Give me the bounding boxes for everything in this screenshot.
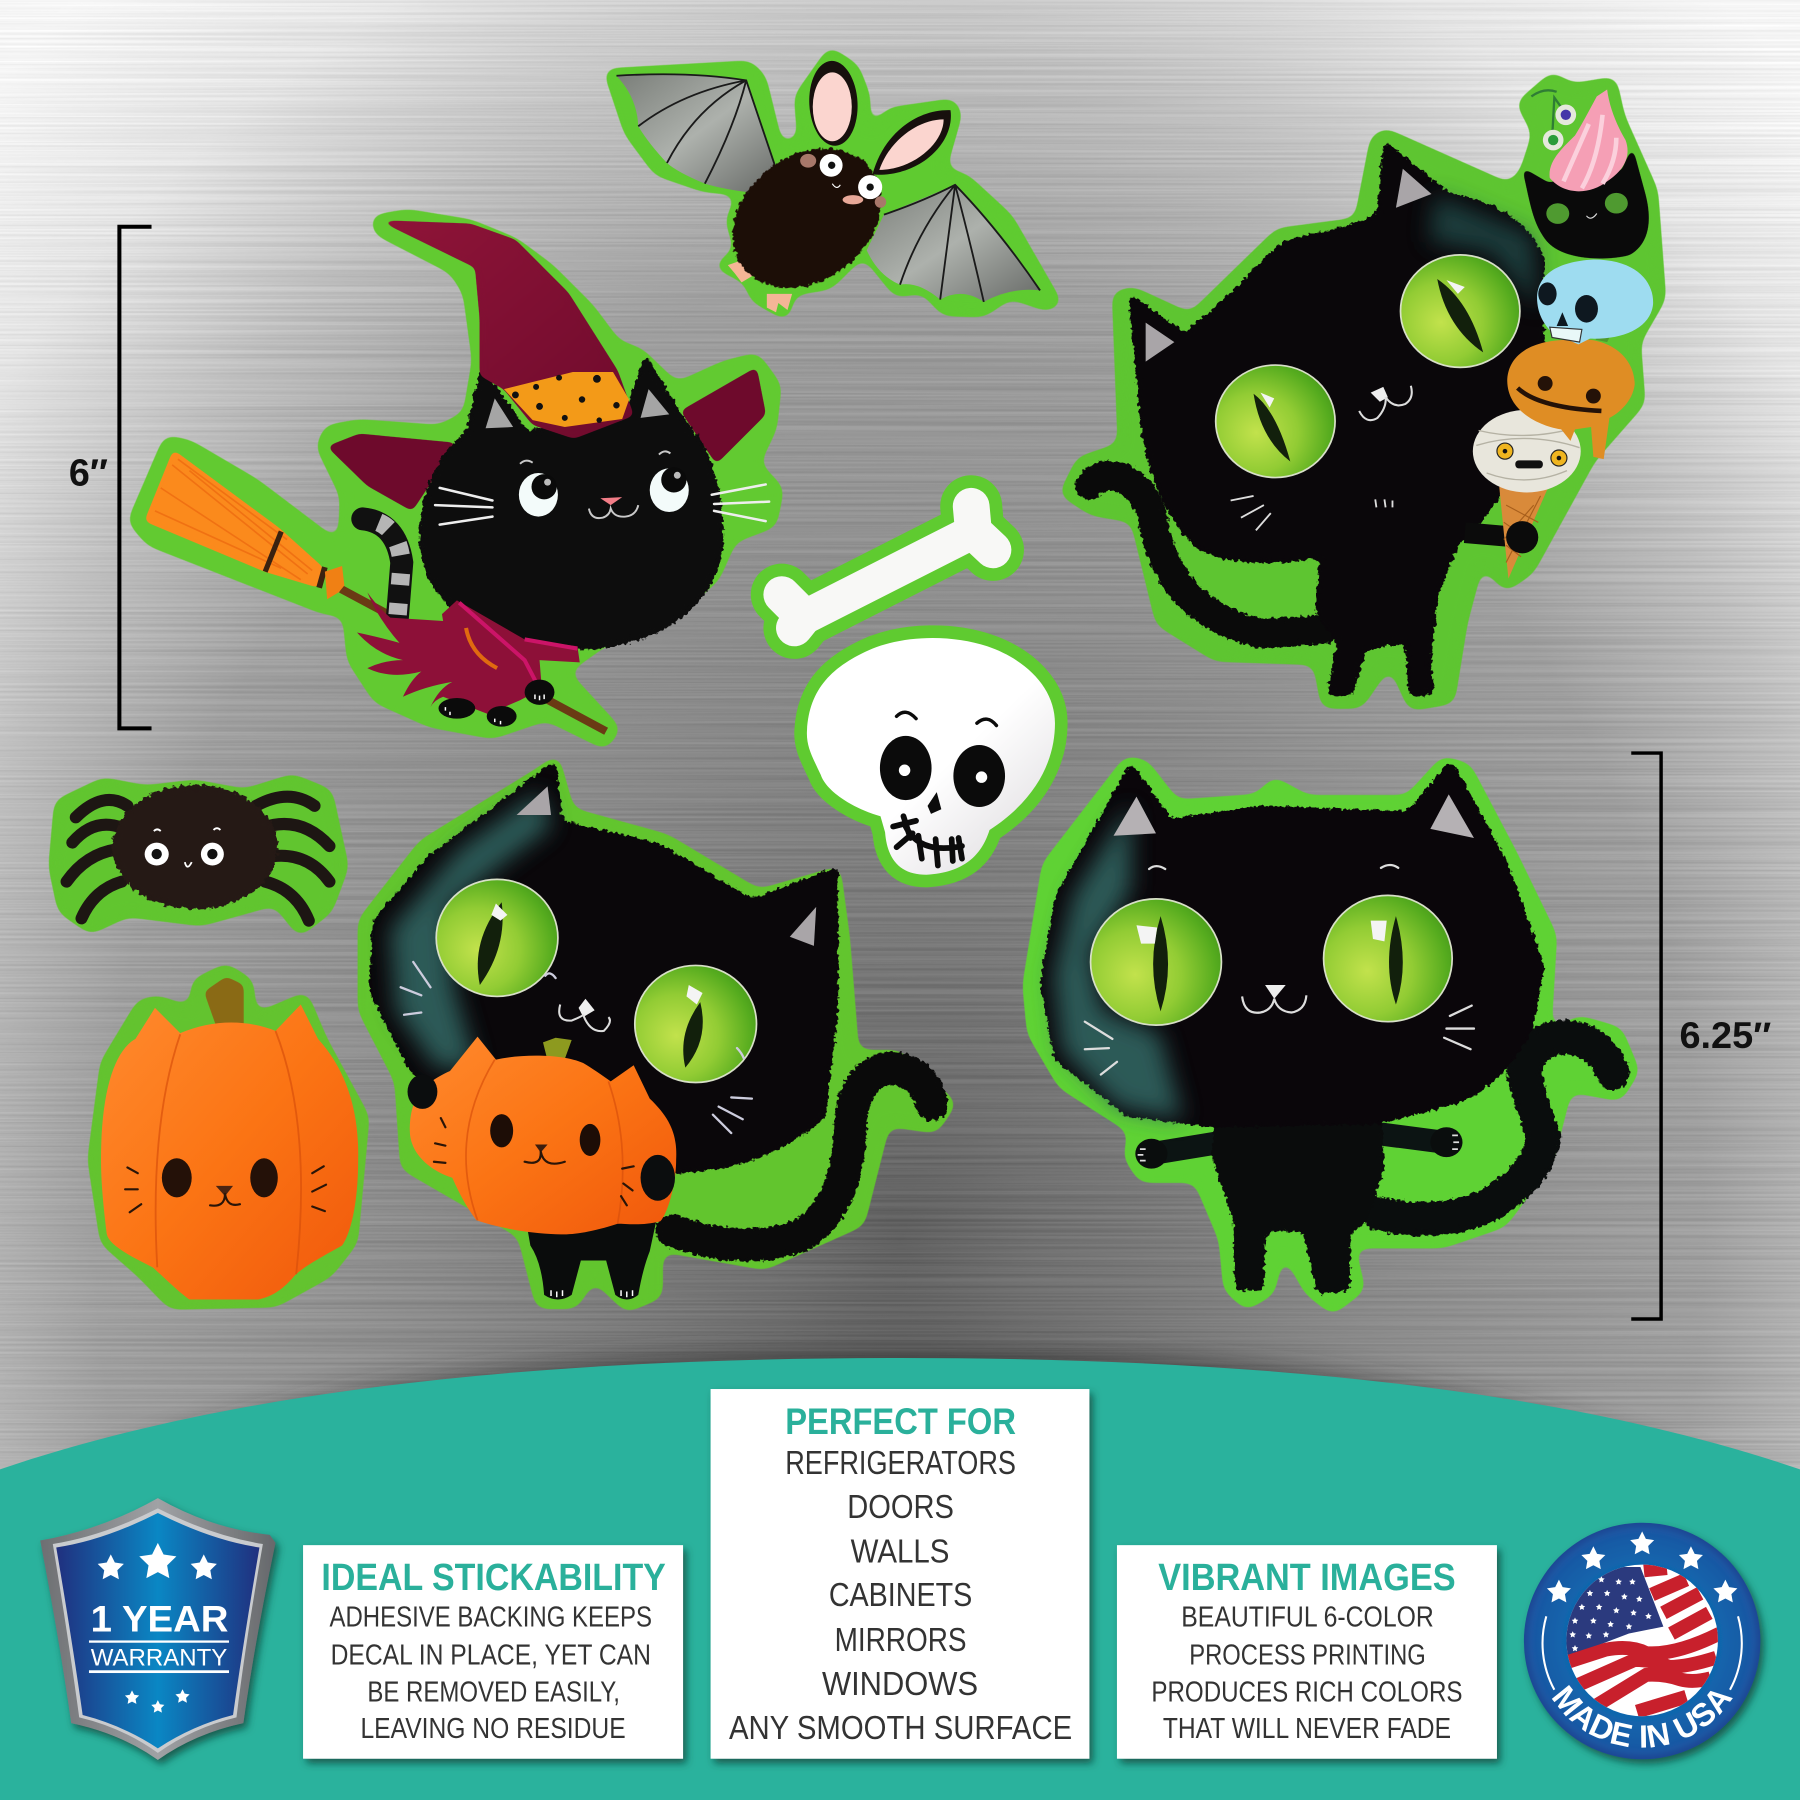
head and body [1128,140,1544,697]
dimension bracket: 6.25 inch [1631,753,1771,1319]
dimension bracket: 6 inch: 6″ [69,453,108,495]
surface list: ANY SMOOTH SURFACE [729,1710,1072,1747]
nose, mouth, whiskers [1231,386,1412,530]
arm holding cone [1465,533,1518,537]
skull face [880,712,1005,866]
legs and lower body [526,1219,657,1299]
body text: BEAUTIFUL 6-COLOR [1181,1602,1434,1634]
made in usa text: MADE IN USA [1552,1685,1733,1748]
cat body [420,354,723,650]
sticker: spider [52,777,346,933]
body text [1151,1602,1462,1745]
body [706,120,909,316]
surface list: REFRIGERATORS [785,1445,1016,1482]
paw toes [1138,1135,1459,1161]
flag [1559,1564,1720,1717]
body text: PRODUCES RICH COLORS [1151,1676,1462,1708]
scoop: mummy [1473,410,1581,492]
sticker: bat [606,49,1060,318]
nose, mouth, whiskers [401,962,752,1133]
body text: ADHESIVE BACKING KEEPS [329,1602,652,1634]
surface list: CABINETS [829,1577,972,1614]
decorative arcs [1543,1616,1742,1690]
sticker: black cat arms out [1025,759,1637,1312]
panel: vibrant images [1117,1545,1497,1759]
cone hand [1506,521,1538,553]
badge stars [1547,1531,1737,1602]
sticker: bone [782,506,993,628]
left wing [616,74,777,193]
panel: ideal stickability [303,1545,683,1759]
heading: VIBRANT IMAGES [1158,1557,1456,1599]
head [1040,760,1544,1127]
ears inner [486,389,669,428]
teal fur shading [1054,804,1182,1119]
arms [1151,1134,1444,1154]
ears inner [1114,794,1474,838]
body text: BE REMOVED EASILY, [367,1676,620,1708]
body text: LEAVING NO RESIDUE [360,1713,626,1745]
held pumpkin [410,1037,676,1234]
broom [145,450,606,731]
tail [1089,475,1326,634]
ears [807,60,951,175]
tail [672,1068,932,1245]
made in usa badge [1522,1522,1768,1768]
sticker: witch cat on broom [131,212,781,746]
pumpkin ribs [156,1031,301,1274]
teal fur shading [1429,195,1538,310]
heading: PERFECT FOR [785,1401,1016,1442]
sticker: skull [807,638,1055,875]
body and legs [1211,1116,1383,1295]
pumpkin face [125,1158,326,1212]
scoop: pumpkin [1507,329,1635,459]
sticker: cat pumpkin [91,967,366,1306]
dimension bracket: 6.25 inch: 6.25″ [1679,1015,1771,1056]
face [435,451,769,525]
heading: IDEAL STICKABILITY [321,1557,666,1599]
eyes [1091,895,1452,1025]
dimension bracket: 6 inch [69,227,152,728]
pumpkin stem [204,977,243,1031]
surface list [729,1445,1072,1747]
waffle cone [1499,487,1547,579]
striped tail [363,519,402,620]
right wing [867,185,1040,302]
head [370,760,838,1174]
hat brim [327,367,766,511]
surface list: WALLS [851,1533,949,1570]
body text: DECAL IN PLACE, YET CAN [331,1640,651,1672]
body text: PROCESS PRINTING [1189,1640,1426,1672]
surface list: MIRRORS [835,1622,967,1659]
spider body [112,785,278,909]
tail [1378,1037,1613,1219]
surface list: WINDOWS [822,1666,978,1703]
sticker: black cat with ice cream cone [1062,75,1663,708]
body text: THAT WILL NEVER FADE [1163,1713,1451,1745]
pumpkin body [101,1004,358,1299]
paws [1135,1127,1462,1169]
ears inner [1146,169,1432,362]
ears inner [517,786,816,946]
surface list: DOORS [847,1489,954,1526]
panel: perfect for [711,1389,1089,1759]
body text [329,1602,652,1745]
sticker: black cat holding pumpkin [360,758,954,1310]
paws [408,1074,675,1201]
1 year text: 1 YEAR [91,1598,228,1639]
toes [551,1290,633,1297]
cloak [357,592,580,714]
witch hat [379,220,634,439]
warranty shield badge [40,1498,276,1760]
nose, mouth, whiskers, brows [1085,865,1474,1074]
eyes [436,879,757,1083]
feet [728,259,792,312]
spider face [145,828,224,867]
warranty text: WARRANTY [91,1645,227,1672]
bat face [800,154,886,208]
spider legs [67,797,329,921]
teal footer band [0,1352,1800,1800]
teal fur shading [390,792,551,1068]
scoop: pink frosting and eyeball cherries [1531,90,1628,191]
eyes [1216,255,1520,478]
scoop: mini cat [1522,147,1649,258]
scoop: blue skull [1537,259,1653,344]
paw toes [445,695,544,724]
paws [439,680,554,727]
